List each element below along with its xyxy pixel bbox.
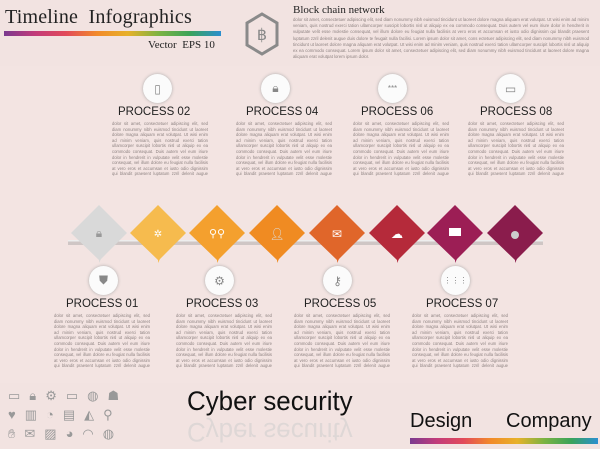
process 04 bbox=[236, 72, 332, 176]
process 05: PROCESS 05 bbox=[304, 298, 376, 310]
brand: design company bbox=[410, 410, 598, 444]
rainbow bar: title bbox=[4, 31, 221, 36]
marker 1 bbox=[71, 205, 127, 263]
process 04: PROCESS 04 bbox=[246, 106, 318, 118]
marker 6: ☁ bbox=[391, 227, 403, 241]
process 01: PROCESS 01 bbox=[66, 298, 138, 310]
process 06 bbox=[353, 72, 449, 176]
subtitle: Vector EPS 10 bbox=[148, 39, 215, 51]
icon: card: ▭ bbox=[505, 82, 516, 96]
reflection: Cyber security bbox=[187, 417, 353, 447]
marker 7 bbox=[427, 205, 483, 263]
icon grid bbox=[8, 388, 128, 441]
icon: phone lock: ▯ bbox=[154, 82, 161, 96]
process 06: PROCESS 06 bbox=[361, 106, 433, 118]
marker 2 bbox=[130, 205, 186, 263]
icon: password: *** bbox=[388, 84, 397, 93]
icon: key bbox=[323, 266, 352, 295]
process 03 bbox=[176, 264, 272, 368]
process 02: PROCESS 02 bbox=[118, 106, 190, 118]
process 02 bbox=[112, 72, 208, 176]
block chain text block: Block chain network bbox=[293, 4, 385, 16]
icon: shield: ⛊ bbox=[99, 273, 108, 287]
icon: bitcoin hexagon: ฿ bbox=[257, 27, 267, 44]
footer panel bbox=[0, 383, 600, 449]
marker 4: 👤︎ bbox=[269, 227, 285, 241]
icon: key: ⚷ bbox=[333, 274, 342, 288]
icon grid: ♥▥◔▤◭⚲ bbox=[8, 407, 122, 422]
icon: phone lock bbox=[143, 74, 172, 103]
process 08 bbox=[468, 72, 564, 176]
title: Timeline Infographics bbox=[5, 6, 192, 28]
marker 1: 🔒︎ bbox=[96, 226, 102, 240]
icon: wifi lock bbox=[261, 74, 290, 103]
icon: wifi lock: 🔒︎ bbox=[272, 81, 279, 95]
icon: bitcoin hexagon bbox=[246, 12, 278, 56]
marker 5 bbox=[309, 205, 365, 263]
marker 6 bbox=[369, 205, 425, 263]
brand: design company: Design bbox=[410, 410, 472, 432]
marker 3 bbox=[189, 205, 245, 263]
process 01 bbox=[54, 264, 150, 368]
icon grid: ▭🔒︎⚙▭◍☗ bbox=[8, 388, 128, 403]
process 05 bbox=[294, 264, 390, 368]
icon: gear lock bbox=[205, 266, 234, 295]
icon: keypad bbox=[441, 266, 470, 295]
icon: keypad: ⋮⋮⋮ bbox=[444, 276, 468, 285]
process 07 bbox=[412, 264, 508, 368]
brand: design company: Company bbox=[506, 410, 592, 432]
icon: password bbox=[378, 74, 407, 103]
marker 4 bbox=[249, 205, 305, 263]
heading: cyber security: Cyber security bbox=[187, 386, 353, 416]
marker 3: ⚲⚲ bbox=[209, 228, 225, 240]
icon grid: ✋︎✉▨◕◠◍ bbox=[8, 426, 123, 441]
process 08: PROCESS 08 bbox=[480, 106, 552, 118]
icon: shield bbox=[89, 266, 118, 295]
marker 5: ✉ bbox=[332, 227, 342, 241]
marker 2: ✲ bbox=[154, 229, 162, 240]
marker 8 bbox=[487, 205, 543, 263]
header panel bbox=[0, 0, 600, 66]
block chain text block: dolor sit amet, consectetuer adipiscing elit, sed diam nonummy nibh euismod tincidunt ut laoreet dolore magna aliquam erat volutpat. Ut wisi enim ad minim veniam, quis nostrud exerci tation ullamcorper suscipit lobortis nisl ut aliquip ex ea commodo consequat. Duis autem vel eum iriure dolor in hendrerit in vulputate velit esse molestie consequat, vel illum dolore eu feugiat nulla facilisis at vero eros et accumsan et iusto odio dignissim qui blandit praesent luptatum zzril delenit augue duis dolore te feugait nulla facilisi. Lorem ipsum dolor sit amet, cons ectetuer adipiscing elit, sed diam nonummy nibh euismod tincidunt ut laoreet dolore magna aliquam erat volutpat. Ut wisi enim ad minim veniam, quis nostrud exerci tation ullamcorper suscipit lobortis nisl ut aliquip ex ea commodo consequat. Lorem ipsum dolor sit amet, consectetuer adipiscing elit, sed diam nonummy nibh euismod tincidunt ut laoreet dolore magna aliquam erat volutpat lorem ipsum dolor. bbox=[293, 17, 589, 59]
timeline with diamond markers bbox=[68, 205, 543, 263]
icon: card bbox=[496, 74, 525, 103]
process 03: PROCESS 03 bbox=[186, 298, 258, 310]
icon: gear lock: ⚙ bbox=[214, 274, 225, 288]
process 07: PROCESS 07 bbox=[426, 298, 498, 310]
